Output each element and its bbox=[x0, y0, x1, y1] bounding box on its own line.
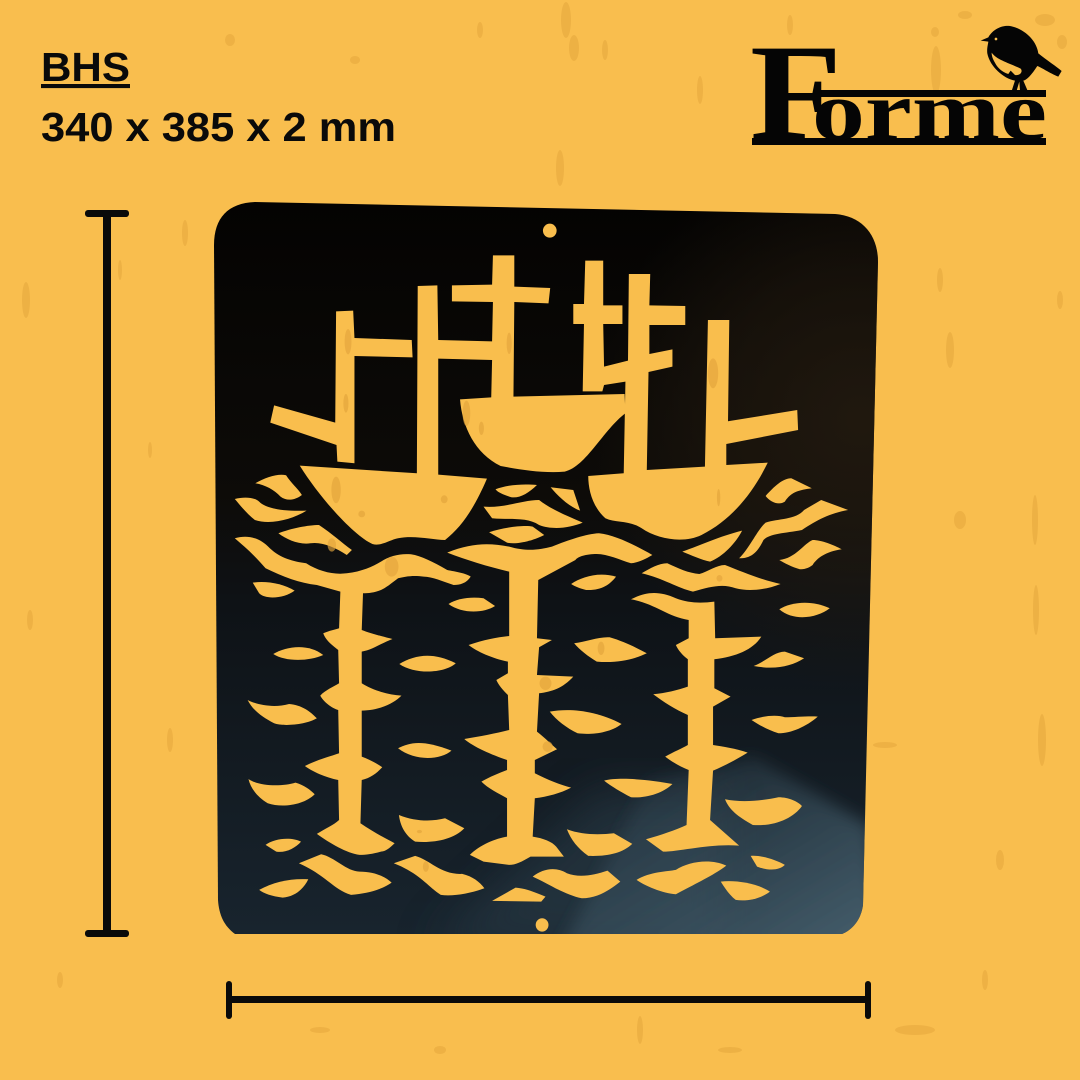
logo: Forme with bird bbox=[752, 26, 1062, 145]
cut-out stains bbox=[328, 329, 722, 872]
ship: left hull with mast and crossbar bbox=[300, 255, 625, 545]
arrow: width dimension bar bbox=[226, 981, 871, 1019]
plate sheen bbox=[470, 788, 698, 934]
reflection: left stalk bbox=[235, 537, 471, 855]
waves: upper left bbox=[235, 475, 352, 555]
reflection: centre stalk bbox=[447, 533, 652, 865]
panel: black metal plate with ships cut-out bbox=[214, 202, 878, 934]
waves: lower shoal bbox=[248, 563, 830, 902]
text: dimensions: 340 x 385 x 2 mm bbox=[41, 104, 396, 150]
logo: Forme with bird: orme bbox=[812, 65, 1047, 158]
ship: left mast bbox=[270, 311, 413, 463]
plate bbox=[214, 202, 878, 934]
ship: right hull with masts bbox=[573, 261, 798, 540]
arrow: height dimension bar bbox=[85, 210, 129, 937]
plate sheen right bbox=[566, 756, 865, 934]
heading: product name: BHS bbox=[41, 44, 130, 90]
hole: top bbox=[543, 224, 557, 238]
waves: upper centre bbox=[484, 484, 583, 543]
reflection: right stalk bbox=[631, 593, 761, 852]
hole: bottom bbox=[536, 918, 549, 932]
plate warm tone bbox=[666, 212, 878, 642]
logo: Forme with bird: F bbox=[750, 16, 842, 169]
waves: upper right bbox=[682, 478, 848, 569]
